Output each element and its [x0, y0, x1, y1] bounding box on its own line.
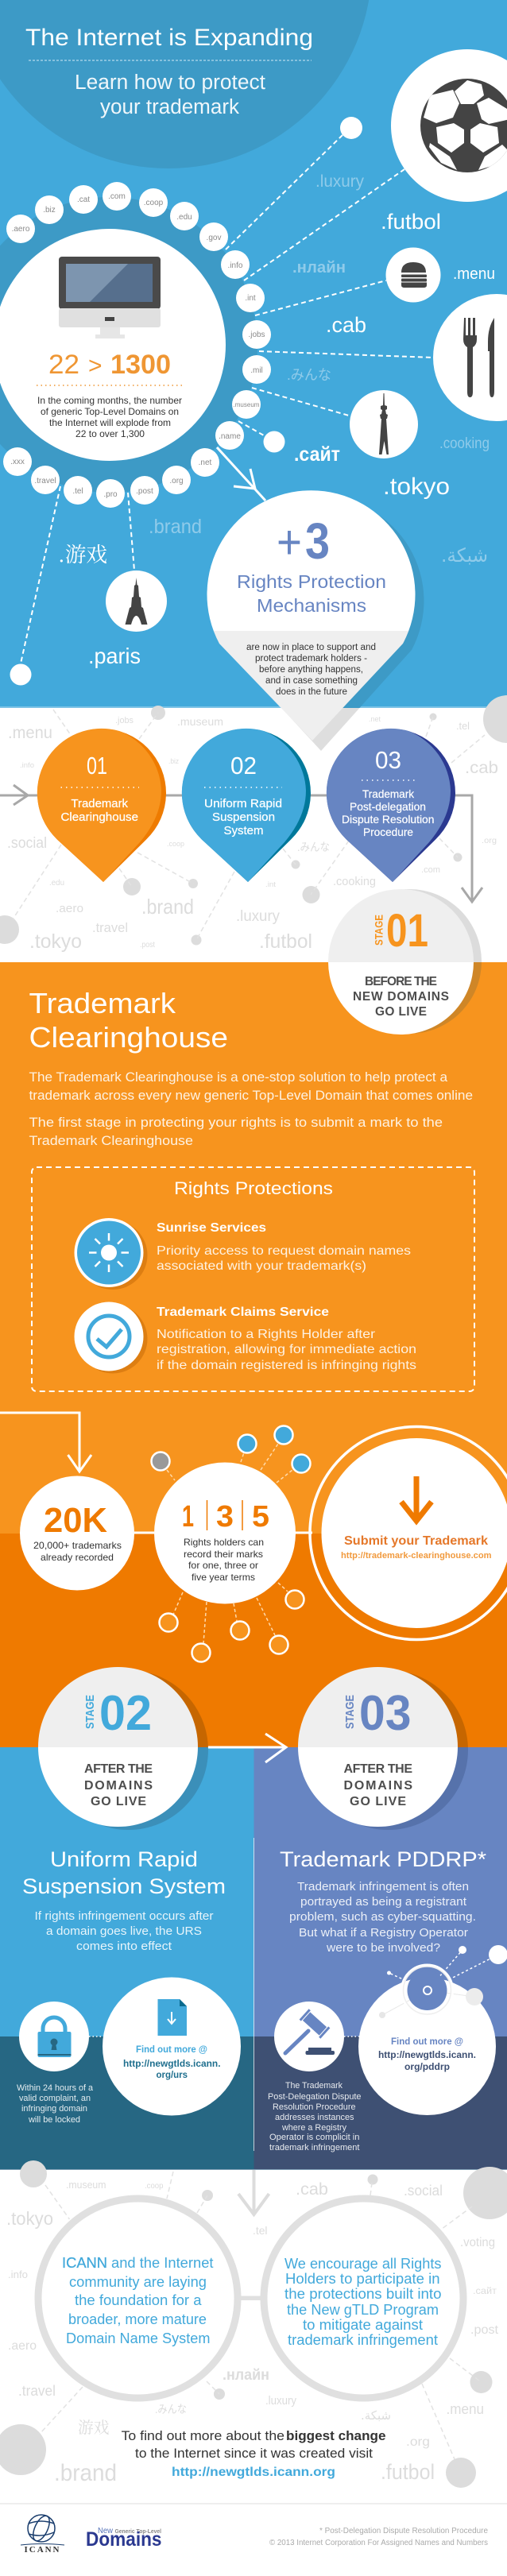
stat: 1 3 5 year terms: record their marks [184, 1549, 263, 1560]
panel: texture background white: .org [482, 837, 497, 845]
text: lock note: valid complaint, an [19, 2094, 91, 2103]
pin: 03 trademark PDDRP [327, 729, 455, 882]
new domain labels: .сайт [294, 443, 340, 466]
text: gTLD explanation: 22 to over 1,300 [75, 429, 145, 439]
text: closing call to action: http://newgtlds.icann.org [172, 2466, 335, 2479]
icon: sun [75, 1218, 148, 1290]
panel: trademark clearinghouse orange background [0, 962, 507, 1747]
text: URS description: If rights infringement occurs after [35, 1909, 213, 1923]
new domain labels: .cab [326, 313, 366, 337]
callout: submit your trademark: Submit your Trademark [344, 1534, 488, 1548]
icon: small dot [264, 431, 284, 453]
existing domain dots: .gov [207, 234, 221, 242]
text: closing call to action: biggest change [286, 2428, 386, 2443]
text: sunrise services: Priority access to request domain names [157, 1244, 411, 1258]
callout: find out more URS [103, 1977, 241, 2115]
callout: encouragement: the protections built into [284, 2286, 442, 2302]
callout: ICANN foundation: broader, more mature [68, 2311, 207, 2327]
panel: texture background white: .luxury [236, 908, 280, 925]
panel: texture background white: .menu [8, 724, 52, 742]
panel: texture background white: .travel [92, 920, 128, 935]
pin: rights protection mechanisms: Rights Protection [237, 571, 386, 592]
heading: uniform rapid suspension system: Suspension System [22, 1874, 226, 1898]
text: clearinghouse description: trademark across every new generic Top-Level Domain that comes online [29, 1088, 473, 1103]
pin: rights protection mechanisms [207, 490, 424, 751]
pin: 02 uniform rapid suspension system: 02 [230, 752, 257, 779]
arrow: to closing circles [238, 2170, 269, 2214]
icon: document download [157, 1999, 187, 2036]
heading: uniform rapid suspension system [22, 1847, 226, 1898]
pin: 03 trademark PDDRP: Procedure [363, 826, 413, 838]
panel: texture background white: .futbol [259, 930, 312, 953]
text: gavel note: Resolution Procedure [273, 2102, 356, 2112]
callout: encouragement: to mitigate against [303, 2317, 423, 2333]
panel: closing texture background: .luxury [265, 2394, 296, 2408]
stat: 1 3 5 year terms: five year terms [192, 1572, 255, 1583]
pin: 03 trademark PDDRP: Post-delegation [350, 800, 426, 813]
badge: stage 01 [328, 889, 482, 1035]
dashed connectors [21, 135, 433, 663]
text: closing call to action: to the Internet since it was created visit [135, 2446, 373, 2461]
panel: closing texture background: .menu [447, 2401, 484, 2417]
existing domain dots: .mil [250, 366, 263, 375]
icon: monitor [59, 257, 161, 338]
pin: rights protection mechanisms: Mechanisms [257, 595, 366, 616]
panel: closing texture background: .post [470, 2323, 499, 2337]
pin: rights protection mechanisms: + [277, 516, 302, 569]
badge: stage 03: GO LIVE [350, 1795, 406, 1808]
logo: ICANN [21, 2513, 64, 2555]
badge: stage 02: DOMAINS [84, 1779, 153, 1793]
existing domain dots: .net [199, 458, 212, 467]
callout: submit your trademark: http://trademark-clearinghouse.com [341, 1551, 492, 1561]
text: gavel note: Post-Delegation Dispute [268, 2092, 361, 2102]
badge: stage 03: STAGE [343, 1695, 357, 1729]
arrow: stage 02 to 03 [198, 1734, 286, 1762]
stat: 1 3 5 year terms [154, 1462, 296, 1603]
new domain labels: .brand [149, 516, 202, 538]
text: gavel note: where a Registry [281, 2123, 346, 2133]
callout: find out more URS: Find out more @ [136, 2044, 207, 2055]
stat: 22 to 1300: 22 [48, 350, 79, 380]
text: clearinghouse description [29, 1069, 473, 1148]
badge: stage 01: NEW DOMAINS [353, 990, 449, 1004]
existing domain dots: .museum [234, 401, 260, 408]
new domain labels: .futbol [381, 210, 441, 234]
text: PDDRP description: But what if a Registry Operator [299, 1926, 468, 1940]
stat: 22 to 1300: > [88, 353, 103, 379]
text: gTLD explanation [37, 396, 182, 439]
panel: closing texture background: 游戏 [78, 2415, 110, 2438]
stat: 1 3 5 year terms: 5 [252, 1500, 269, 1534]
text: footnote and copyright: © 2013 Internet Corporation For Assigned Names and Numbers [269, 2539, 488, 2547]
text: gavel note [268, 2081, 361, 2152]
pin: 01 trademark clearinghouse [37, 729, 166, 882]
callout: ICANN foundation: the foundation for a [75, 2292, 203, 2308]
existing domain dots: .cat [77, 195, 90, 204]
panel: texture background white: .aero [56, 902, 83, 915]
central white circle [0, 229, 226, 461]
icon: lower left dot [10, 664, 32, 685]
pin: 01 trademark clearinghouse: 01 [87, 752, 107, 779]
pin: rights protection mechanisms: before anything happens, [259, 665, 363, 675]
panel: stage 02 background [0, 1747, 254, 2169]
text: footnote and copyright: * Post-Delegation Dispute Resolution Procedure [319, 2527, 488, 2535]
subtitle: your trademark [100, 96, 239, 118]
panel: texture background white: .cooking [333, 875, 376, 888]
pin: 03 trademark PDDRP: Dispute Resolution [342, 813, 434, 826]
stat: 1 3 5 year terms: 3 [216, 1500, 234, 1534]
existing domain dots: .int [245, 294, 256, 303]
callout: find out more PDDRP: http://newgtlds.icann. [378, 2049, 476, 2060]
callout: submit your trademark [310, 1427, 507, 1640]
arrow: submit down [401, 1476, 432, 1521]
text: lock note: infringing domain [21, 2104, 87, 2114]
text: PDDRP description: problem, such as cyber-squatting. [289, 1910, 476, 1924]
existing domain dots: .xxx [10, 458, 25, 466]
panel: closing texture background: .cab [296, 2180, 328, 2199]
badge: stage 02 [38, 1667, 208, 1830]
panel: texture background white: .jobs [115, 716, 134, 725]
callout: ICANN foundation: and the Internet [111, 2255, 213, 2271]
new domain labels: .нлайн [292, 259, 346, 277]
text: sunrise services: associated with your trademark(s) [157, 1259, 366, 1273]
panel: closing texture background: .aero [8, 2339, 37, 2353]
dotted links [89, 2036, 359, 2037]
panel: texture background white: .com [421, 865, 440, 875]
icon: eiffel tower [106, 571, 167, 632]
text: lock note [17, 2083, 94, 2125]
panel: texture background white: .みんな [297, 841, 330, 853]
panel: texture background white: .edu [49, 879, 64, 888]
badge: stage 03 [298, 1667, 468, 1830]
orbit dots [151, 1425, 310, 1662]
heading: trademark clearinghouse: Trademark [29, 987, 176, 1019]
badge: stage 03: 03 [359, 1686, 412, 1741]
subtitle: Learn how to protect [75, 72, 265, 94]
new domain labels: .luxury [315, 172, 364, 191]
panel: closing texture background: .brand [54, 2460, 117, 2486]
connector lines [134, 1532, 312, 1534]
existing domain dots: .jobs [248, 331, 265, 339]
icon: fork and knife [433, 294, 507, 421]
panel: closing texture background: .tel [253, 2224, 267, 2237]
stat: 22 to 1300 [48, 350, 171, 380]
existing domain dots: .biz [43, 206, 56, 215]
panel: texture background white: .museum [177, 715, 223, 728]
icon: burger [386, 248, 440, 302]
pin: rights protection mechanisms: protect trademark holders - [255, 654, 367, 663]
heading: trademark clearinghouse: Clearinghouse [29, 1021, 228, 1054]
callout: encouragement: trademark infringement [288, 2332, 438, 2348]
text: PDDRP description: were to be involved? [326, 1941, 440, 1955]
panel: stage 03 background [254, 1747, 507, 2169]
panel: closing texture background: .info [8, 2269, 28, 2280]
existing domain dots: .aero [12, 225, 30, 234]
text: gavel note: addresses instances [275, 2113, 354, 2122]
new domain labels: .menu [453, 265, 495, 283]
text: trademark claims service: if the domain registered is infringing rights [157, 1359, 416, 1372]
pin: rights protection mechanisms: 3 [305, 512, 330, 570]
pin: 02 uniform rapid suspension system: System [224, 824, 264, 837]
panel: texture background white: .post [140, 941, 155, 950]
panel: closing texture background [0, 2160, 507, 2576]
panel: texture background white [0, 695, 507, 962]
callout: find out more PDDRP [358, 1945, 507, 2115]
arrow: mechanism flow line [0, 785, 482, 902]
badge: stage 02: STAGE [83, 1695, 97, 1729]
logo: new generic top-level domains: Domains [86, 2528, 162, 2551]
callout: encouragement: Holders to participate in [285, 2271, 440, 2287]
existing domain dots: .org [169, 477, 184, 485]
panel: closing texture background: .voting [460, 2236, 495, 2249]
existing domain dots: .info [228, 261, 243, 270]
stat: 1 3 5 year terms: Rights holders can [184, 1537, 264, 1548]
panel: texture background white: .biz [168, 757, 179, 765]
connector: closing circles [241, 2296, 261, 2300]
badge: stage 01: BEFORE THE [365, 975, 437, 988]
heading: uniform rapid suspension system: Uniform Rapid [50, 1847, 198, 1871]
text: gavel note: trademark infringement [269, 2143, 359, 2152]
new domain labels: .شبكة [441, 544, 488, 567]
panel: closing texture background: .tokyo [6, 2208, 53, 2229]
panel: closing texture background: .сайт [473, 2285, 497, 2296]
title circle [0, 0, 372, 168]
new domain labels: .cooking [439, 435, 490, 452]
panel: closing texture background: .coop [145, 2182, 164, 2191]
logo: new generic top-level domains: Generic Top-Level [114, 2529, 161, 2535]
callout: find out more PDDRP: Find out more @ [391, 2036, 463, 2047]
text: PDDRP description: portrayed as being a registrant [300, 1895, 467, 1909]
panel: closing texture background: .museum [66, 2179, 106, 2191]
panel: rights protections [32, 1167, 474, 1391]
text: sunrise services [157, 1221, 411, 1273]
icon: gavel [274, 2002, 344, 2071]
text: sunrise services: Sunrise Services [157, 1221, 266, 1235]
badge: stage 03: AFTER THE [343, 1762, 412, 1776]
callout: ICANN foundation: ICANN [62, 2255, 107, 2271]
pin: rights protection mechanisms: are now in place to support and [246, 643, 376, 652]
pin: 02 uniform rapid suspension system: Uniform Rapid [204, 797, 282, 810]
badge: stage 02: AFTER THE [84, 1762, 153, 1776]
new domain labels: .tokyo [383, 474, 450, 500]
new domain labels: .paris [88, 644, 141, 668]
existing domain dots: .pro [103, 490, 118, 499]
pin: 01 trademark clearinghouse: Clearinghouse [60, 810, 138, 824]
callout: encouragement: We encourage all Rights [284, 2256, 442, 2272]
logo: ICANN: ICANN [24, 2545, 60, 2555]
heading: trademark clearinghouse [29, 987, 228, 1054]
text: lock note: will be locked [28, 2115, 80, 2125]
callout: ICANN foundation: community are laying [69, 2274, 207, 2290]
badge: stage 02: GO LIVE [91, 1795, 146, 1808]
central ring [0, 197, 257, 493]
existing domain dots: .coop [144, 199, 164, 207]
pin: rights protection mechanisms: and in case something [265, 676, 358, 686]
callout: ICANN foundation: Domain Name System [66, 2330, 210, 2346]
text: URS description [35, 1909, 213, 1953]
panel: texture background white: .tel [456, 720, 470, 732]
stat: 20K [20, 1476, 134, 1591]
icon: lock [19, 2002, 89, 2071]
panel: closing texture background: .شبكة [361, 2408, 391, 2423]
existing domain dots: .post [136, 487, 153, 496]
text: trademark claims service: Notification to a Rights Holder after [157, 1328, 376, 1341]
text: closing call to action [122, 2428, 386, 2479]
stat: 22 to 1300: 1300 [110, 350, 171, 380]
text: clearinghouse description: Trademark Clearinghouse [29, 1133, 193, 1148]
heading: trademark PDDRP: Trademark PDDRP* [280, 1847, 487, 1871]
icon: soccer ball [391, 49, 507, 202]
icon: network target [379, 1945, 507, 2018]
stat: 20K: 20K [44, 1501, 107, 1540]
new domain labels: .みんな [287, 367, 331, 383]
stat: 1 3 5 year terms: for one, three or [188, 1560, 258, 1571]
text: closing call to action: To find out more about the [122, 2428, 284, 2443]
pin: 03 trademark PDDRP: 03 [375, 746, 401, 774]
text: gTLD explanation: of generic Top-Level Domains on [41, 407, 179, 417]
panel: texture background white: .brand [141, 895, 194, 919]
text: URS description: comes into effect [76, 1940, 172, 1953]
panel: closing texture background: .みんな [155, 2403, 187, 2415]
panel: texture background white: .info [20, 761, 34, 769]
text: trademark claims service [157, 1305, 416, 1372]
callout: find out more URS: http://newgtlds.icann. [123, 2058, 221, 2069]
arrow: to rights protection [217, 447, 265, 501]
subtitle [75, 72, 265, 118]
pin: 03 trademark PDDRP: Trademark [362, 787, 415, 800]
panel: texture background white: .tokyo [29, 930, 82, 953]
text: gavel note: The Trademark [285, 2081, 343, 2091]
text: gavel note: Operator is complicit in [269, 2133, 359, 2142]
callout: find out more URS: org/urs [156, 2069, 188, 2080]
text: clearinghouse description: The Trademark Clearinghouse is a one-stop solution to help protect a [29, 1069, 448, 1085]
pin: 02 uniform rapid suspension system: Suspension [212, 810, 275, 824]
panel: closing texture background: .travel [18, 2383, 56, 2399]
pin: 01 trademark clearinghouse: Trademark [72, 797, 128, 810]
panel: closing texture background: .нлайн [223, 2367, 269, 2384]
text: footnote and copyright [269, 2527, 488, 2547]
text: clearinghouse description: The first stage in protecting your rights is to submit a mark to the [29, 1115, 443, 1130]
text: trademark claims service: registration, allowing for immediate action [157, 1343, 416, 1356]
badge: stage 01: STAGE [372, 915, 385, 946]
panel: closing texture background: .org [406, 2435, 430, 2449]
panel: texture background white: .cab [465, 759, 498, 777]
badge: stage 03: DOMAINS [343, 1779, 412, 1793]
title: The Internet is Expanding [25, 25, 313, 51]
callout: encouragement [264, 2199, 463, 2398]
text: URS description: a domain goes live, the URS [46, 1924, 202, 1938]
text: lock note: Within 24 hours of a [17, 2083, 94, 2093]
existing domain dots: .edu [176, 213, 192, 222]
pin: 02 uniform rapid suspension system [182, 729, 311, 882]
text: trademark claims service: Trademark Claims Service [157, 1305, 329, 1319]
text: PDDRP description: Trademark infringement is often [297, 1880, 469, 1893]
new domain labels [58, 172, 495, 668]
panel: texture background white: .int [265, 880, 277, 888]
existing domain dots: .tel [72, 487, 83, 496]
panel: texture background white: .social [7, 835, 47, 852]
stat: 20K: 20,000+ trademarks [33, 1540, 122, 1551]
text: PDDRP description [289, 1880, 476, 1955]
arrow: to 20K [0, 1413, 91, 1472]
icon: luxury dot [340, 117, 362, 139]
existing domain dots: .travel [34, 477, 56, 485]
panel: rights protections: Rights Protections [174, 1178, 333, 1198]
badge: stage 01: GO LIVE [375, 1005, 427, 1019]
stat: 1 3 5 year terms: 1 [182, 1500, 194, 1534]
dashed spokes [167, 1444, 292, 1643]
panel: texture background white: .net [369, 715, 381, 723]
callout: encouragement: the New gTLD Program [287, 2302, 439, 2318]
panel: closing texture background: .futbol [381, 2460, 435, 2484]
badge: stage 02: 02 [99, 1686, 152, 1741]
icon: check mark [75, 1302, 148, 1373]
panel: texture background white: .coop [167, 840, 184, 848]
new domain labels: .游戏 [58, 539, 107, 568]
panel: closing texture background: .social [404, 2183, 443, 2199]
panel: intro blue background [0, 0, 507, 708]
callout: ICANN foundation [38, 2199, 238, 2398]
existing domain dots: .name [219, 432, 241, 441]
pin: rights protection mechanisms: does in the future [276, 687, 347, 697]
text: gTLD explanation: the Internet will explode from [49, 418, 171, 428]
callout: find out more PDDRP: org/pddrp [404, 2061, 450, 2072]
logo: new generic top-level domains: New [98, 2527, 114, 2535]
existing domain dots [3, 182, 271, 508]
existing domain dots: .com [108, 192, 126, 201]
stat: 20K: already recorded [41, 1552, 114, 1563]
badge: stage 01: 01 [386, 905, 428, 957]
text: gTLD explanation: In the coming months, the number [37, 396, 182, 406]
icon: tokyo tower [350, 390, 418, 458]
